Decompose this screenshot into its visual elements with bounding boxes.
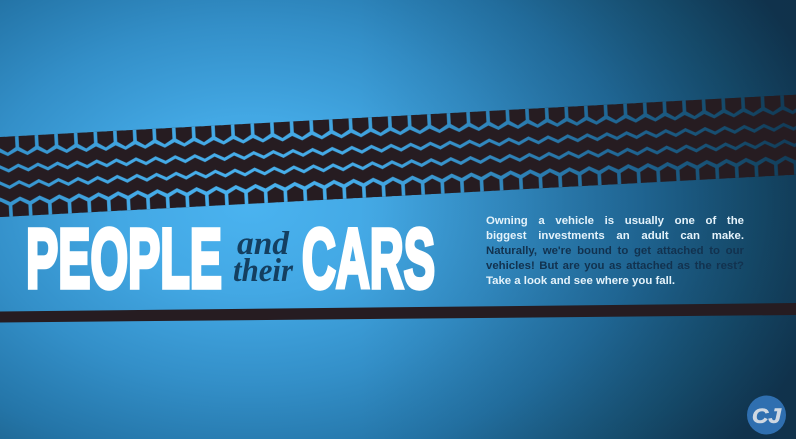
intro paragraph: biggest investments an adult can make.	[486, 230, 744, 242]
lower tire stripe	[0, 303, 796, 322]
title: and: and	[237, 226, 289, 262]
intro paragraph	[486, 215, 744, 287]
intro paragraph: Naturally, we're bound to get attached to our	[486, 245, 744, 257]
intro paragraph: Owning a vehicle is usually one of the	[486, 215, 744, 227]
title: PEOPLE: PEOPLE	[26, 212, 222, 306]
title: CARS: CARS	[302, 212, 435, 306]
intro paragraph: vehicles! But are you as attached as the rest?	[486, 260, 744, 272]
logo badge	[747, 396, 786, 434]
intro paragraph: Take a look and see where you fall.	[486, 275, 675, 287]
tire track band	[0, 92, 796, 218]
logo badge: CJ	[752, 405, 782, 428]
title: their: their	[233, 253, 294, 289]
